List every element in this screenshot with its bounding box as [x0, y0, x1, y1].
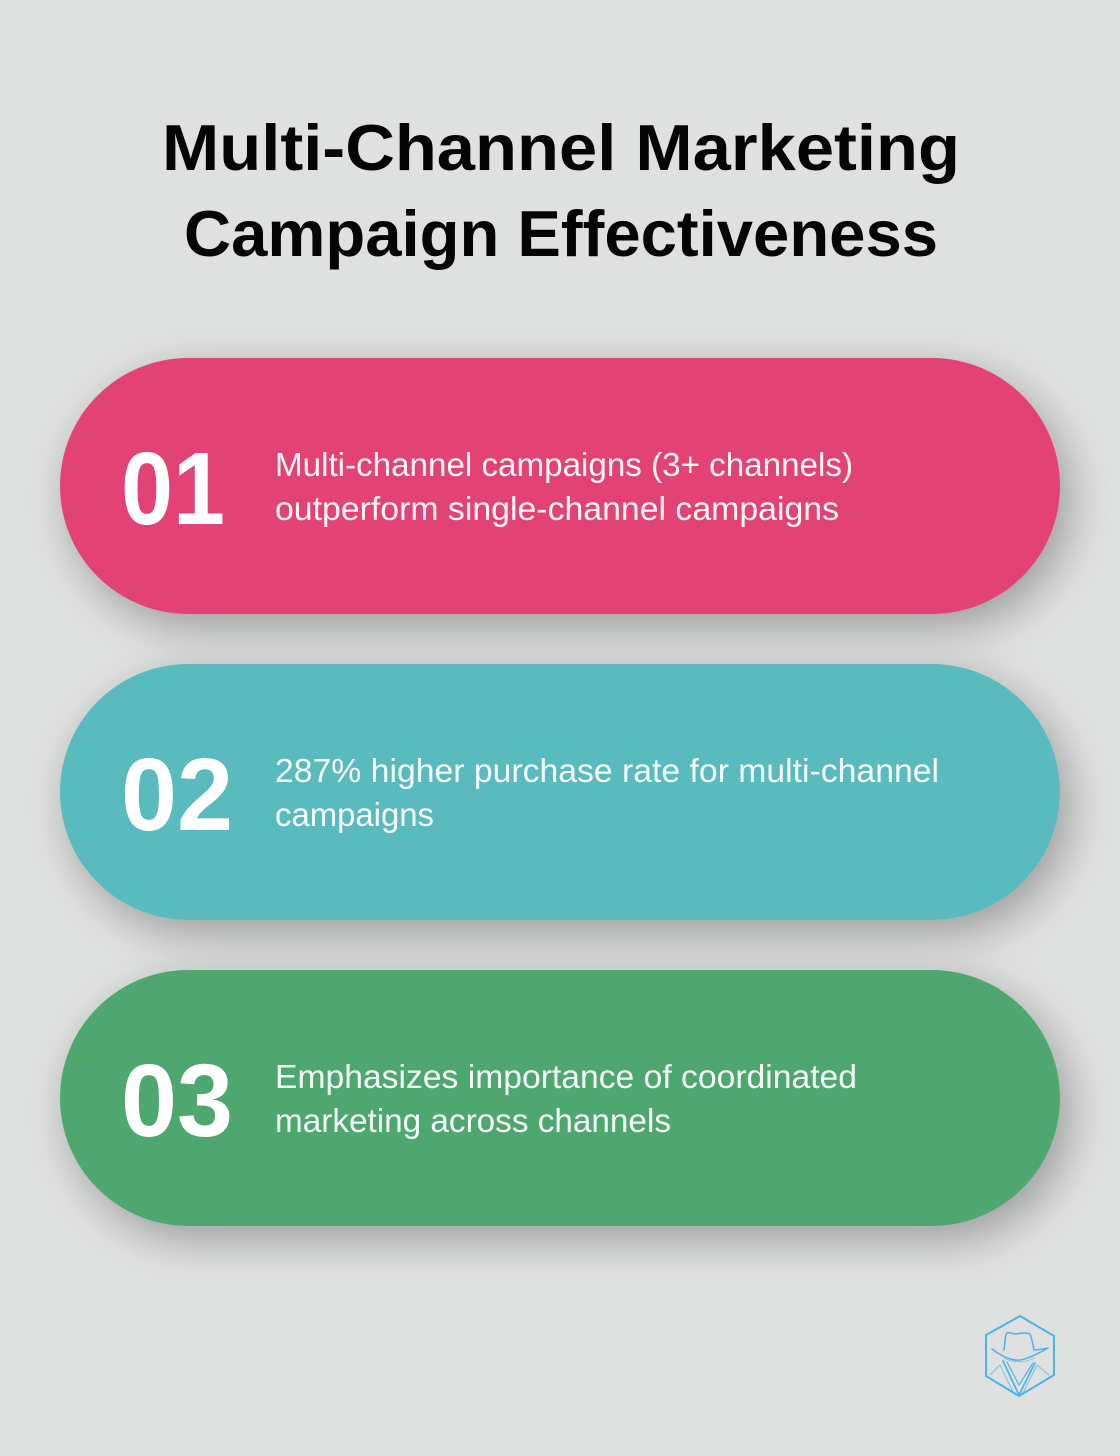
title: Multi-Channel Marketing	[162, 111, 960, 184]
number 02: 02	[121, 737, 233, 852]
pill background: pink	[60, 358, 1060, 614]
description 01: outperform single-channel campaigns	[275, 490, 839, 527]
number 03: 03	[121, 1043, 233, 1158]
icon: spy hat logo	[986, 1316, 1054, 1396]
description 03: Emphasizes importance of coordinated	[275, 1058, 857, 1095]
panel: step 01	[60, 358, 1060, 614]
panel: step 02	[60, 664, 1060, 920]
pill background: teal	[60, 664, 1060, 920]
description 02	[275, 752, 939, 833]
panel: step 03	[60, 970, 1060, 1226]
description 03: marketing across channels	[275, 1102, 671, 1139]
description 02: campaigns	[275, 796, 434, 833]
description 01	[275, 446, 853, 527]
title	[162, 111, 960, 270]
description 02: 287% higher purchase rate for multi-channel	[275, 752, 939, 789]
description 03	[275, 1058, 857, 1139]
number 01: 01	[121, 431, 225, 546]
description 01: Multi-channel campaigns (3+ channels)	[275, 446, 853, 483]
pill background: green	[60, 970, 1060, 1226]
title: Campaign Effectiveness	[184, 197, 938, 270]
